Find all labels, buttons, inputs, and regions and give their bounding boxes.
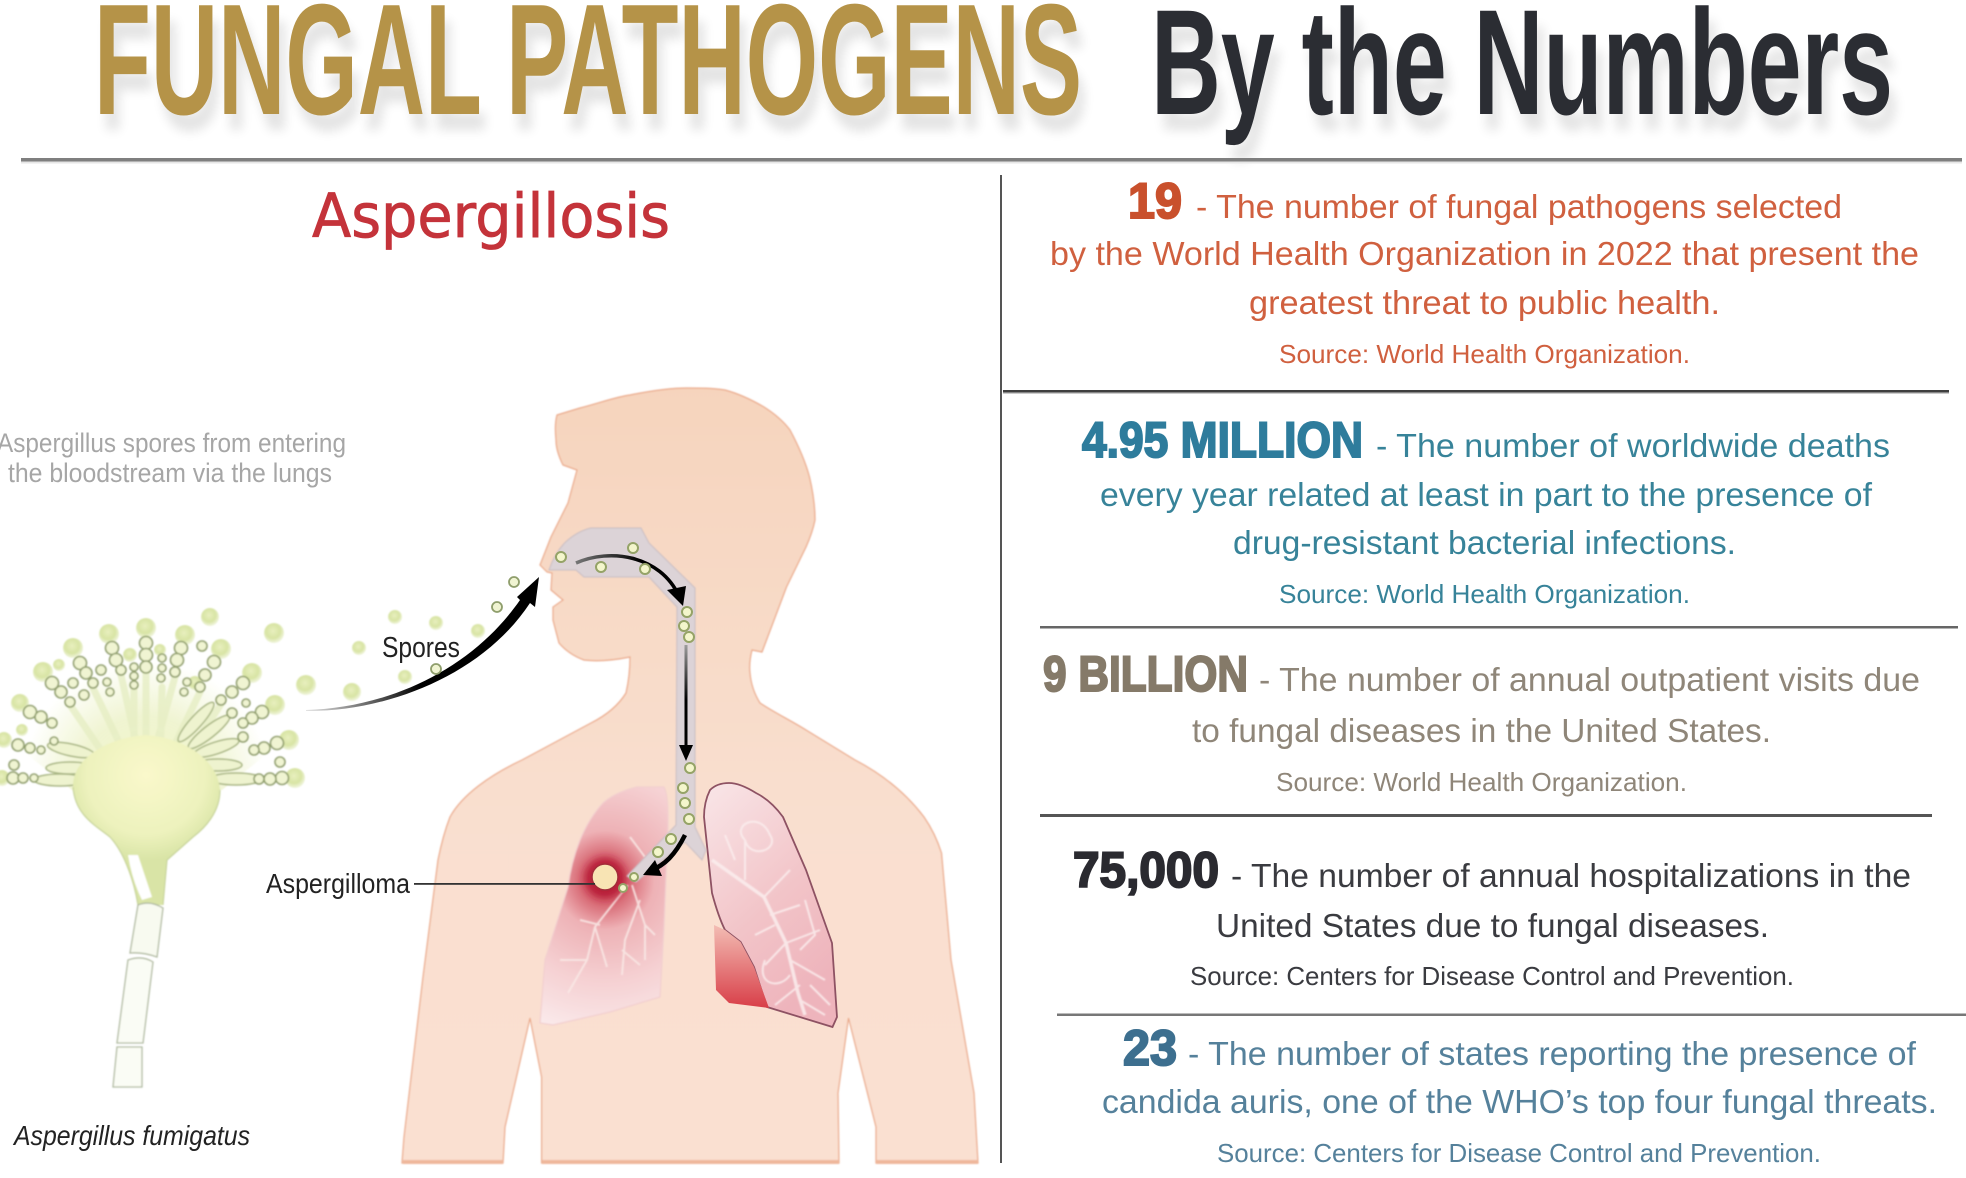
- caption: spores: [0, 428, 346, 488]
- description: every year related at least in part to the presence of: [1100, 476, 1873, 513]
- lung: with effusion: [704, 783, 837, 1027]
- description: candida auris, one of the WHO’s top four fungal threats.: [1102, 1083, 1937, 1120]
- stat: 23 states: [1102, 1020, 1937, 1168]
- description: [1050, 188, 1919, 321]
- aspergilloma lesion: [585, 858, 625, 898]
- label: spores: Spores: [382, 632, 460, 664]
- arrow: airway to trachea: [576, 556, 693, 876]
- pleural effusion: [714, 925, 769, 1008]
- description: by the World Health Organization in 2022 that present the: [1050, 235, 1919, 272]
- panel: aspergillosis illustration: [0, 181, 978, 1164]
- lung: infected: [540, 787, 668, 1025]
- description: - The number of annual outpatient visits due: [1259, 661, 1920, 698]
- label: aspergillus fumigatus: Aspergillus fumigatus: [12, 1120, 250, 1151]
- airborne spores: [431, 577, 519, 674]
- description: to fungal diseases in the United States.: [1192, 712, 1771, 749]
- airway: [549, 528, 706, 882]
- human body: [402, 388, 978, 1164]
- description: - The number of fungal pathogens selected: [1196, 188, 1842, 225]
- description: - The number of worldwide deaths: [1376, 427, 1890, 464]
- description: [1192, 661, 1920, 749]
- description: - The number of annual hospitalizations in the: [1231, 857, 1911, 894]
- stat: 19 pathogens: [1050, 173, 1919, 369]
- description: [1100, 427, 1890, 561]
- caption: spores: the bloodstream via the lungs: [8, 458, 332, 488]
- number: 4.95 MILLION: [1082, 412, 1363, 468]
- number: 75,000: [1073, 842, 1219, 898]
- description: drug-resistant bacterial infections.: [1233, 524, 1736, 561]
- label: aspergilloma: Aspergilloma: [266, 868, 410, 899]
- stat: 9 billion: [1043, 646, 1920, 797]
- description: [1102, 1035, 1937, 1120]
- source: Source: Centers for Disease Control and Prevention.: [1190, 961, 1794, 991]
- arrow: spores to nose: [306, 577, 539, 711]
- description: [1216, 857, 1911, 944]
- description: greatest threat to public health.: [1249, 284, 1720, 321]
- source: Source: Centers for Disease Control and Prevention.: [1217, 1138, 1821, 1168]
- icon: aspergillus fungus: [0, 608, 485, 1087]
- number: 9 BILLION: [1043, 646, 1248, 702]
- heading: aspergillosis: Aspergillosis: [312, 181, 670, 252]
- stat: 4.95 million: [1082, 412, 1890, 609]
- description: United States due to fungal diseases.: [1216, 907, 1769, 944]
- title: [94, 0, 1893, 148]
- source: Source: World Health Organization.: [1276, 767, 1687, 797]
- description: - The number of states reporting the presence of: [1188, 1035, 1917, 1072]
- number: 19: [1128, 173, 1182, 229]
- source: Source: World Health Organization.: [1279, 579, 1690, 609]
- stat: 75,000: [1073, 842, 1911, 991]
- airway spores: [556, 543, 695, 892]
- source: Source: World Health Organization.: [1279, 339, 1690, 369]
- caption: spores: Aspergillus spores from entering: [0, 428, 346, 458]
- number: 23: [1123, 1020, 1177, 1076]
